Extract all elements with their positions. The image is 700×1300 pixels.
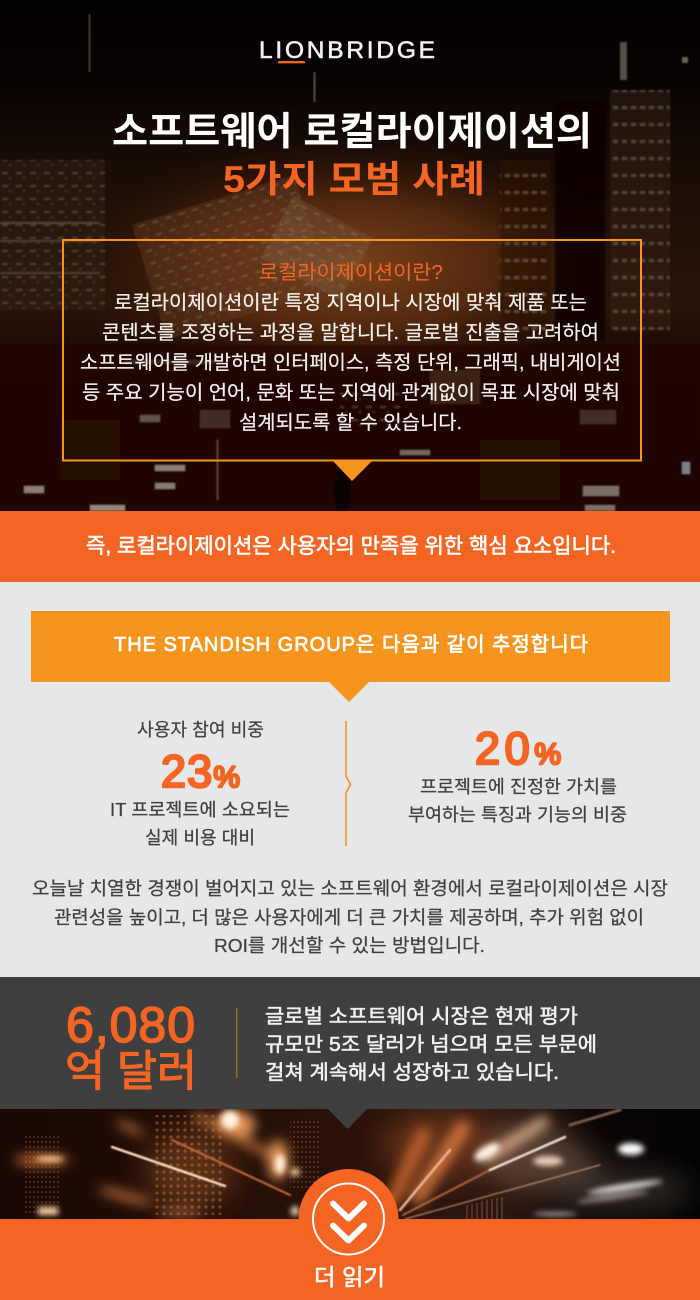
stat: 20%: 20% — [475, 723, 561, 774]
footer band: read more — [0, 1169, 700, 1300]
big number — [65, 997, 197, 1096]
banner: key statement: 즉, 로컬라이제이션은 사용자의 만족을 위한 핵심 요소입니다. — [86, 535, 616, 558]
logo: Lionbridge: LIONBRIDGE — [259, 37, 435, 64]
panel: what is localization — [63, 240, 641, 460]
panel body text: 설계되도록 할 수 있습니다. — [239, 412, 462, 434]
stat: 23%: IT 프로젝트에 소요되는 — [110, 800, 290, 820]
stat: 20%: 부여하는 특징과 기능의 비중 — [408, 805, 627, 825]
paragraph: localization value: ROI를 개선할 수 있는 방법입니다. — [214, 935, 485, 956]
person silhouette — [334, 468, 351, 511]
panel body text: 로컬라이제이션이란 특정 지역이나 시장에 맞춰 제품 또는 — [114, 292, 587, 314]
heading banner: Standish Group: THE STANDISH GROUP은 다음과 같이 추정합니다 — [114, 633, 588, 656]
paragraph: localization value — [32, 878, 668, 956]
market text: 걸쳐 계속해서 성장하고 있습니다. — [265, 1061, 559, 1084]
panel: global software market — [0, 977, 700, 1109]
paragraph: localization value: 오늘날 치열한 경쟁이 벌어지고 있는 소프트웨어 환경에서 로컬라이제이션은 시장 — [32, 878, 668, 899]
background photo: night city skyline — [0, 0, 700, 511]
stat: 23% — [110, 720, 290, 848]
stat: 23%: 23% — [161, 746, 240, 797]
big number: 6,080 — [66, 997, 195, 1053]
panel body text: 소프트웨어를 개발하면 인터페이스, 측정 단위, 그래픽, 내비게이션 — [80, 352, 621, 374]
panel heading: 로컬라이제이션이란? — [259, 261, 443, 284]
background photo: light streaks — [0, 1109, 700, 1219]
market text: 글로벌 소프트웨어 시장은 현재 평가 — [265, 1005, 578, 1028]
stat: 20%: 프로젝트에 진정한 가치를 — [420, 777, 617, 797]
market text — [265, 1005, 597, 1084]
title: 소프트웨어 로컬라이제이션의 — [112, 111, 592, 154]
panel body text — [80, 292, 621, 434]
panel body text: 등 주요 기능이 언어, 문화 또는 지역에 관계없이 목표 시장에 맞춰 — [82, 382, 620, 404]
arrow: dark pointer — [328, 1109, 367, 1129]
big number: 억 달러 — [65, 1048, 197, 1096]
heading banner: Standish Group — [31, 611, 670, 702]
arrow: panel pointer — [333, 461, 372, 481]
stat: 23%: 사용자 참여 비중 — [137, 720, 264, 740]
icon: double chevron in ring — [313, 1184, 384, 1254]
title — [112, 111, 592, 200]
paragraph: localization value: 관련성을 높이고, 더 많은 사용자에게 더 큰 가치를 제공하며, 추가 위험 없이 — [54, 907, 644, 928]
stat: 23%: 실제 비용 대비 — [145, 828, 255, 848]
stat: 20% — [408, 723, 627, 825]
section background: light grey — [0, 582, 700, 977]
panel body text: 콘텐츠를 조정하는 과정을 말합니다. 글로벌 진출을 고려하여 — [102, 322, 599, 344]
market text: 규모만 5조 달러가 넘으며 모든 부문에 — [265, 1033, 597, 1056]
read more label: 더 읽기 — [314, 1264, 385, 1290]
banner: key statement — [0, 511, 700, 582]
divider with chevron — [346, 721, 350, 846]
title: 5가지 모범 사례 — [223, 159, 485, 200]
